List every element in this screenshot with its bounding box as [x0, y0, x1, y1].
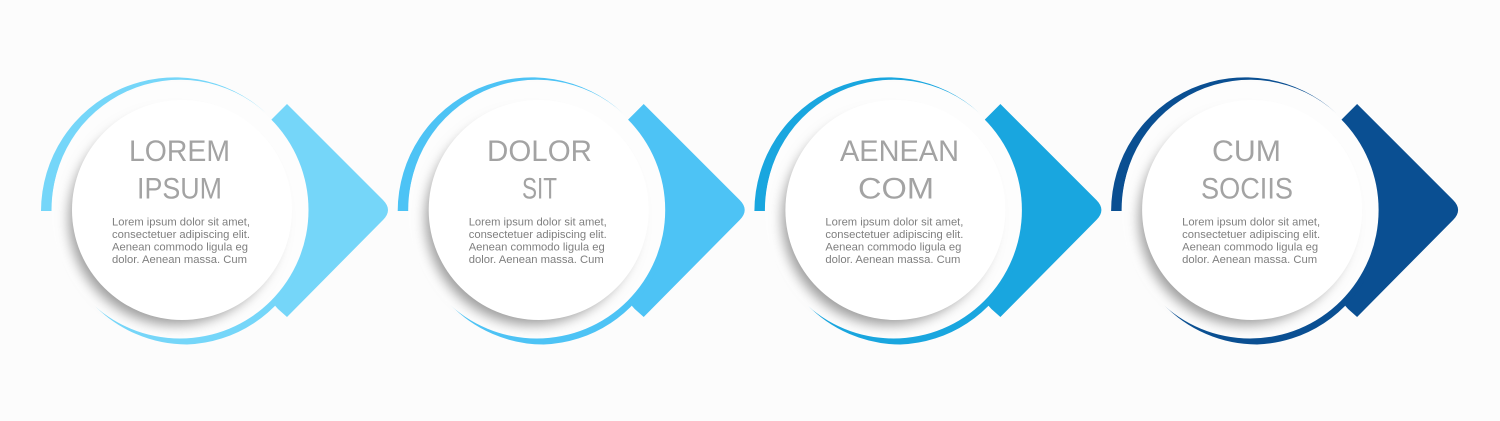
body text 1: dolor. Aenean massa. Cum — [112, 254, 247, 266]
body text 1: Aenean commodo ligula eg — [112, 242, 248, 254]
body text 4 — [1182, 216, 1320, 266]
step 2: dolor sit — [398, 77, 745, 345]
body text 3: dolor. Aenean massa. Cum — [825, 254, 960, 266]
halo disc 4 — [1122, 82, 1379, 338]
step 3: aenean com — [754, 77, 1101, 345]
heading 4: CUM — [1212, 135, 1281, 168]
ring arc bottom 2 — [450, 220, 657, 344]
arrow 4 — [1260, 104, 1458, 317]
halo disc 2 — [408, 82, 665, 338]
body text 3: Aenean commodo ligula eg — [825, 242, 961, 254]
body text 4: dolor. Aenean massa. Cum — [1182, 254, 1317, 266]
shadow 4 — [1139, 113, 1351, 325]
heading 2: DOLOR — [487, 135, 592, 168]
white disc 1 — [72, 100, 292, 320]
arrow 2 — [547, 104, 745, 317]
shadow 2 — [426, 113, 638, 325]
heading 3: AENEAN — [840, 135, 959, 168]
heading 4: SOCIIS — [1201, 172, 1293, 206]
heading 2: SIT — [522, 172, 557, 206]
heading 1 — [129, 135, 230, 206]
ring arc bottom 1 — [93, 220, 300, 344]
white disc 3 — [785, 100, 1005, 320]
body text 2: Lorem ipsum dolor sit amet, — [469, 216, 607, 228]
step 4: cum sociis — [1111, 77, 1458, 345]
white disc 4 — [1142, 100, 1362, 320]
halo disc 3 — [765, 82, 1022, 338]
body text 3: Lorem ipsum dolor sit amet, — [825, 216, 963, 228]
heading 3 — [840, 135, 959, 206]
ring arc top 1 — [41, 77, 266, 211]
heading 2 — [487, 135, 592, 206]
shadow 3 — [782, 113, 994, 325]
ring arc bottom 3 — [806, 220, 1013, 344]
heading 1: LOREM — [129, 135, 230, 168]
white disc 2 — [429, 100, 649, 320]
ring arc top 4 — [1111, 77, 1336, 211]
body text 4: Lorem ipsum dolor sit amet, — [1182, 216, 1320, 228]
ring arc top 3 — [754, 77, 979, 211]
body text 1 — [112, 216, 250, 266]
arrow 1 — [190, 104, 388, 317]
halo disc 1 — [52, 82, 308, 338]
ring arc top 2 — [398, 77, 623, 211]
heading 3: COM — [858, 172, 934, 206]
body text 1: Lorem ipsum dolor sit amet, — [112, 216, 250, 228]
body text 4: Aenean commodo ligula eg — [1182, 242, 1318, 254]
body text 2: dolor. Aenean massa. Cum — [469, 254, 604, 266]
body text 4: consectetuer adipiscing elit. — [1182, 229, 1320, 241]
arrow 3 — [903, 104, 1101, 317]
body text 2: consectetuer adipiscing elit. — [469, 229, 607, 241]
body text 3: consectetuer adipiscing elit. — [825, 229, 963, 241]
step 1: lorem ipsum — [41, 77, 388, 345]
heading 1: IPSUM — [137, 172, 222, 206]
body text 3 — [825, 216, 963, 266]
heading 4 — [1201, 135, 1293, 206]
shadow 1 — [69, 113, 281, 325]
body text 1: consectetuer adipiscing elit. — [112, 229, 250, 241]
body text 2: Aenean commodo ligula eg — [469, 242, 605, 254]
body text 2 — [469, 216, 607, 266]
ring arc bottom 4 — [1163, 220, 1370, 344]
